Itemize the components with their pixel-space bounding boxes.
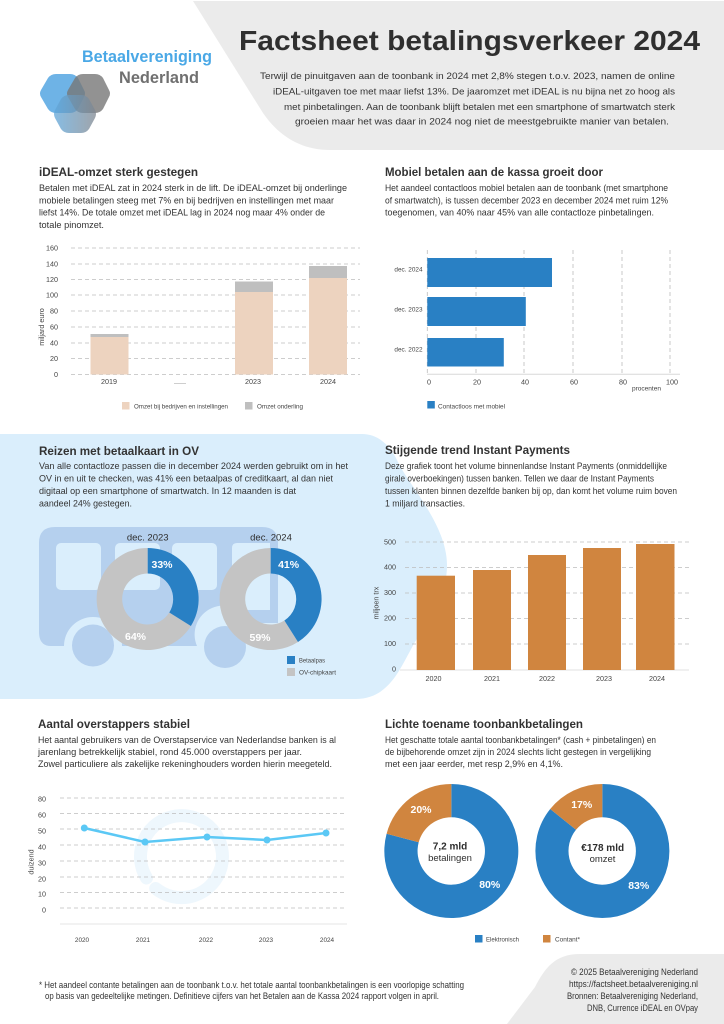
text block: totale pinomzet. <box>39 220 104 230</box>
legend <box>475 935 581 944</box>
text block: Deze grafiek toont het volume binnenlandse Instant Payments (onmiddellijke <box>385 461 667 471</box>
legend <box>427 401 505 410</box>
legend: Elektronisch <box>486 936 519 944</box>
panel: overstappers <box>26 717 347 944</box>
icon: bus <box>39 527 278 668</box>
footer credits: © 2025 Betaalvereniging Nederland <box>571 967 698 977</box>
text block: jarenlang betrekkelijk stabiel, rond 45.000 overstappers per jaar. <box>37 747 302 757</box>
bar chart: instant payments <box>372 538 689 683</box>
legend: OV-chipkaart <box>299 670 336 676</box>
bar chart: instant payments: 2020 <box>426 674 442 683</box>
text block: tussen klanten binnen dezelfde banken bij op, dan komt het volume ruim boven <box>385 486 677 496</box>
text block: Het geschatte totale aantal toonbankbetalingen* (cash + pinbetalingen) en <box>385 735 656 745</box>
line chart: overstappers: 2024 <box>320 937 335 944</box>
bar chart: contactloos mobiel: 100 <box>666 378 678 386</box>
footnote: op basis van gedeeltelijke metingen. Definitieve cijfers van het Betalen aan de Kassa 2024 rapport volgen in april. <box>45 991 439 1001</box>
bar chart: contactloos mobiel: 60 <box>570 378 578 386</box>
intro text: Terwijl de pinuitgaven aan de toonbank in 2024 met 2,8% stegen t.o.v. 2023, namen de online <box>260 71 675 81</box>
donut chart: betalingen <box>384 784 518 918</box>
text block: digitaal op een smartphone of smartwatch. In 12 maanden is dat <box>39 486 296 496</box>
line chart: overstappers: 2021 <box>136 937 151 944</box>
line chart: overstappers: 20 <box>38 874 46 884</box>
donut chart: betalingen: 7,2 mld <box>433 842 467 852</box>
text block <box>385 735 656 769</box>
donut chart: dec. 2024 <box>220 532 322 650</box>
text block: liefst 14%. De totale omzet met iDEAL lag in 2024 nog maar 4% onder de <box>39 208 325 218</box>
legend: Contactloos met mobiel <box>438 404 505 410</box>
icon: watermark circle <box>140 816 222 898</box>
footnote <box>39 980 464 1001</box>
line chart: overstappers: 40 <box>38 842 46 852</box>
title: Factsheet betalingsverkeer 2024 <box>239 25 700 56</box>
donut chart: dec. 2023: 64% <box>125 631 147 643</box>
footer background shape <box>507 954 724 1024</box>
donut chart: omzet: omzet <box>590 854 616 865</box>
text block <box>39 461 348 508</box>
text block: Van alle contactloze passen die in december 2024 werden gebruikt om in het <box>39 461 348 471</box>
bar chart: contactloos mobiel: 80 <box>619 378 627 386</box>
bar chart: iDEAL-omzet: 0 <box>54 370 58 379</box>
heading: Reizen met betaalkaart in OV <box>39 444 199 458</box>
logo name: Nederland <box>119 68 199 87</box>
donut chart: dec. 2023: dec. 2023 <box>127 532 169 544</box>
bar chart: instant payments: 200 <box>384 614 396 622</box>
intro text: met pinbetalingen. Aan de toonbank blijft betalen met een smartphone of smartwatch sterk <box>284 102 675 112</box>
bar chart: iDEAL-omzet: 120 <box>46 275 58 284</box>
donut chart: omzet: 83% <box>628 880 650 892</box>
text block: mobiele betalingen steeg met 7% en bij bedrijven en instellingen met maar <box>39 196 334 206</box>
panel: reizen met betaalkaart <box>39 444 348 676</box>
panel: toonbankbetalingen <box>384 717 669 944</box>
line chart: overstappers: 2022 <box>199 937 214 944</box>
line chart: overstappers: 0 <box>42 906 46 914</box>
text block <box>37 735 336 769</box>
bar chart: iDEAL-omzet: miljard euro <box>37 308 46 346</box>
text block: of smartwatch), is tussen december 2023 en december 2024 met ruim 12% <box>385 196 668 206</box>
line chart: overstappers: 60 <box>38 810 46 820</box>
intro text: groeien maar het was daar in 2024 nog niet de meestgebruikte manier van betalen. <box>295 116 669 126</box>
text block: aandeel 24% gestegen. <box>39 498 132 508</box>
bar chart: iDEAL-omzet: 160 <box>46 244 58 252</box>
footer credits: DNB, Currence iDEAL en OVpay <box>587 1003 698 1013</box>
heading: Lichte toename toonbankbetalingen <box>385 717 583 731</box>
bar chart: contactloos mobiel: procenten <box>632 386 661 392</box>
donut chart: dec. 2024: 41% <box>278 559 300 571</box>
line chart: overstappers <box>26 794 347 944</box>
bar chart: iDEAL-omzet: 40 <box>50 338 58 348</box>
legend: Contant* <box>555 936 581 944</box>
text block: Betalen met iDEAL zat in 2024 sterk in de lift. De iDEAL-omzet bij onderlinge <box>39 183 347 193</box>
bar chart: iDEAL-omzet: 60 <box>50 322 58 332</box>
line chart: overstappers: 80 <box>38 794 46 804</box>
bar chart: iDEAL-omzet: 2024 <box>320 377 336 386</box>
heading: Aantal overstappers stabiel <box>38 717 190 731</box>
icon: hexagons <box>40 74 110 133</box>
bar chart: iDEAL-omzet: 20 <box>50 354 58 363</box>
panel: reizen background <box>0 434 447 699</box>
donut chart: omzet: €178 mld <box>581 843 624 854</box>
bar chart: iDEAL-omzet: 100 <box>46 290 58 300</box>
header background shape <box>193 1 724 150</box>
bar chart: contactloos mobiel: dec. 2023 <box>394 306 423 314</box>
donut chart: dec. 2024: 59% <box>249 632 271 644</box>
panel: iDEAL-omzet <box>37 165 360 410</box>
text block: girale overboekingen) tussen banken. Tellen we daar de Instant Payments <box>385 474 654 484</box>
text block: OV in en uit te checken, was 41% een betaalpas of creditkaart, al dan niet <box>39 474 333 484</box>
text block: Het aantal gebruikers van de Overstapservice van Nederlandse banken is al <box>38 735 336 745</box>
panel: instant payments <box>372 443 689 683</box>
text block <box>385 461 677 508</box>
line chart: overstappers: 50 <box>38 826 46 836</box>
text block: Het aandeel contactloos mobiel betalen aan de toonbank (met smartphone <box>385 183 668 193</box>
legend <box>122 402 303 410</box>
bar chart: instant payments: 300 <box>384 588 396 597</box>
text block: de bijbehorende omzet zijn in 2024 slechts licht gestegen in vergelijking <box>385 747 651 757</box>
bar chart: instant payments: 500 <box>384 538 396 546</box>
bar chart: instant payments: 400 <box>384 562 396 572</box>
bar chart: instant payments: 2022 <box>539 674 555 683</box>
legend <box>287 656 336 676</box>
bar chart: instant payments: 0 <box>392 664 396 674</box>
bar chart: iDEAL-omzet: 2019 <box>101 377 117 386</box>
donut chart: dec. 2023: 33% <box>151 559 173 571</box>
footer credits: Bronnen: Betaalvereniging Nederland, <box>567 991 698 1001</box>
heading: iDEAL-omzet sterk gestegen <box>39 165 198 179</box>
line chart: overstappers: 30 <box>38 858 46 868</box>
text block: met een jaar eerder, met resp 2,9% en 4,1%. <box>385 759 563 769</box>
intro text: iDEAL-uitgaven toe met maar liefst 13%. De jaaromzet met iDEAL is nu bijna net zo hoog als <box>273 86 675 96</box>
legend: Omzet onderling <box>257 404 303 410</box>
legend: Betaalpas <box>299 658 325 664</box>
donut chart: omzet <box>535 784 669 918</box>
heading: Stijgende trend Instant Payments <box>385 443 570 457</box>
footer credits: https://factsheet.betaalvereniging.nl <box>569 979 698 989</box>
bar chart: iDEAL-omzet <box>37 244 360 410</box>
text block: 1 miljard transacties. <box>385 498 465 508</box>
intro text <box>260 71 675 126</box>
logo <box>40 47 212 133</box>
footer credits <box>567 967 698 1013</box>
text block: toegenomen, van 40% naar 45% van alle contactloze pinbetalingen. <box>385 208 654 218</box>
bar chart: instant payments: miljoen trx <box>372 586 380 619</box>
bar chart: contactloos mobiel: 0 <box>427 378 431 386</box>
footnote: * Het aandeel contante betalingen aan de toonbank t.o.v. het totale aantal toonbankbetalingen is een voorlopige schatting <box>39 980 464 990</box>
logo name <box>82 47 212 87</box>
bar chart: contactloos mobiel: dec. 2022 <box>394 346 423 354</box>
donut chart: betalingen: 20% <box>410 804 432 816</box>
bar chart: iDEAL-omzet: ...... <box>174 377 186 386</box>
donut chart: betalingen: 80% <box>479 879 501 891</box>
donut chart: omzet: 17% <box>571 799 593 811</box>
heading: Mobiel betalen aan de kassa groeit door <box>385 165 603 179</box>
panel: mobiel betalen <box>385 165 680 410</box>
donut chart: dec. 2024: dec. 2024 <box>250 532 292 544</box>
bar chart: iDEAL-omzet: 80 <box>50 306 58 316</box>
bar chart: contactloos mobiel: 40 <box>521 378 529 386</box>
text block <box>39 183 347 230</box>
bar chart: iDEAL-omzet: 140 <box>46 260 58 268</box>
bar chart: contactloos mobiel <box>394 250 680 410</box>
logo name: Betaalvereniging <box>82 47 212 66</box>
line chart: overstappers: 10 <box>38 890 46 898</box>
legend: Omzet bij bedrijven en instellingen <box>134 404 228 410</box>
donut chart: betalingen: betalingen <box>428 853 472 864</box>
line chart: overstappers: 2020 <box>75 937 90 944</box>
bar chart: instant payments: 2021 <box>484 674 500 683</box>
line chart: overstappers: duizend <box>26 849 36 875</box>
bar chart: instant payments: 100 <box>384 639 396 648</box>
bar chart: instant payments: 2024 <box>649 674 665 683</box>
text block <box>385 183 668 218</box>
bar chart: contactloos mobiel: dec. 2024 <box>394 266 423 274</box>
bar chart: instant payments: 2023 <box>596 674 612 683</box>
text block: Zowel particuliere als zakelijke rekeninghouders worden hierin meegeteld. <box>38 759 332 769</box>
bar chart: iDEAL-omzet: 2023 <box>245 377 261 386</box>
bar chart: contactloos mobiel: 20 <box>473 378 481 386</box>
line chart: overstappers: 2023 <box>259 937 274 944</box>
donut chart: dec. 2023 <box>97 532 199 650</box>
